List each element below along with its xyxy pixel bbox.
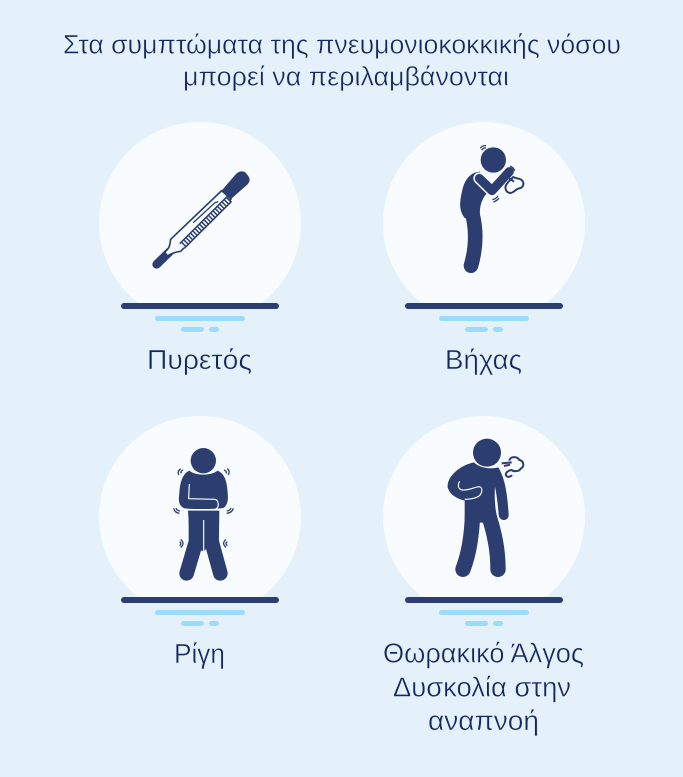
panel: cough bbox=[383, 122, 585, 375]
bar: middle highlight bbox=[439, 610, 529, 615]
label: chills: Ρίγη bbox=[174, 638, 225, 669]
icon: thermometer bbox=[157, 171, 250, 264]
panel: chest pain and difficulty breathing bbox=[383, 416, 585, 736]
bar: ground line bbox=[121, 597, 279, 603]
panel: fever bbox=[99, 122, 301, 375]
bar: middle highlight bbox=[155, 316, 245, 321]
panel: chills bbox=[99, 416, 301, 669]
bar: short highlights bbox=[181, 327, 219, 332]
label: chest pain and difficulty breathing bbox=[383, 638, 584, 736]
label: chest pain and difficulty breathing: Δυσκολία στην bbox=[393, 672, 571, 702]
label: chest pain and difficulty breathing: Θωρακικό Άλγος bbox=[383, 638, 584, 668]
label: fever: Πυρετός bbox=[147, 344, 252, 375]
title: μπορεί να περιλαμβάνονται bbox=[183, 62, 509, 92]
fever backdrop circle bbox=[99, 122, 301, 303]
title: Στα συμπτώματα της πνευμονιοκοκκικής νόσου bbox=[63, 30, 621, 60]
bar: ground line bbox=[121, 303, 279, 309]
icon: person holding chest bbox=[448, 439, 523, 569]
bar: middle highlight bbox=[439, 316, 529, 321]
chest pain backdrop circle bbox=[383, 416, 585, 597]
chills backdrop circle bbox=[99, 416, 301, 597]
bar: ground line bbox=[405, 597, 563, 603]
bar: ground line bbox=[405, 303, 563, 309]
cough backdrop circle bbox=[383, 122, 585, 303]
label: cough: Βήχας bbox=[445, 344, 522, 375]
bar: short highlights bbox=[465, 621, 503, 626]
title bbox=[63, 30, 621, 92]
icon: shivering person bbox=[174, 448, 233, 573]
bar: short highlights bbox=[465, 327, 503, 332]
icon: coughing person bbox=[460, 146, 523, 266]
bar: middle highlight bbox=[155, 610, 245, 615]
bar: short highlights bbox=[181, 621, 219, 626]
label: chest pain and difficulty breathing: αναπνοή bbox=[428, 705, 539, 736]
